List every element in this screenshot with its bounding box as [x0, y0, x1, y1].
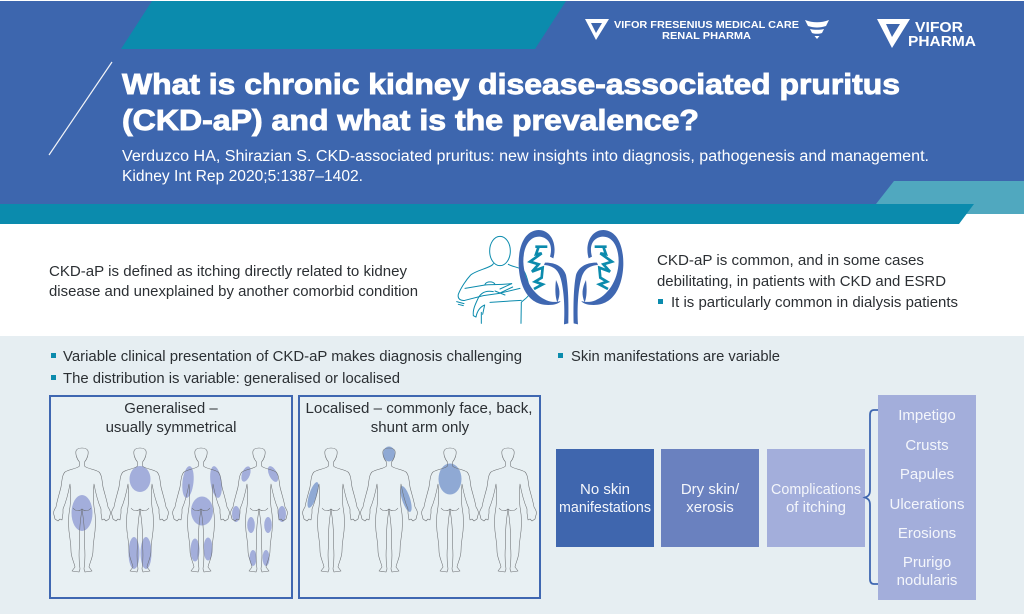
box: dry skin: [661, 449, 759, 547]
citation: Kidney Int Rep 2020;5:1387–1402.: [122, 168, 363, 185]
box: complications of itching: Complications: [771, 481, 861, 498]
bullets: diagnosis: Variable clinical presentation of CKD-aP makes diagnosis challenging: [63, 348, 522, 365]
logo: Vifor Pharma: [877, 19, 977, 50]
bottom teal bar: [0, 204, 974, 224]
title: What is chronic kidney disease-associated pruritus: [122, 69, 900, 101]
body figures: [303, 448, 536, 572]
logo: Vifor Fresenius Medical Care Renal Pharma: [585, 19, 829, 42]
box: no skin manifestations: No skin: [580, 481, 630, 498]
icon: person itching with kidneys: [457, 230, 623, 324]
panel: localised: [299, 396, 540, 598]
bullets: diagnosis: [51, 348, 522, 387]
logo: Vifor Fresenius Medical Care Renal Pharma: RENAL PHARMA: [662, 30, 751, 42]
panel: complications list: [878, 395, 976, 600]
panel: generalised: Generalised –: [124, 400, 218, 417]
box: no skin manifestations: manifestations: [559, 499, 651, 516]
title: (CKD-aP) and what is the prevalence?: [122, 105, 699, 137]
lower section background: [0, 336, 1024, 614]
left kidney: [519, 230, 561, 305]
diagonal accent line: [49, 62, 112, 155]
logo: Vifor Pharma: PHARMA: [908, 34, 977, 50]
title: [122, 69, 900, 137]
panel: complications list: Crusts: [905, 437, 949, 454]
prevalence text: CKD-aP is common, and in some cases: [657, 252, 924, 269]
citation: Verduzco HA, Shirazian S. CKD-associated pruritus: new insights into diagnosis, pathogenesis and management.: [122, 148, 929, 165]
right kidney: [574, 230, 623, 324]
itch areas: [305, 446, 462, 513]
panel: localised: shunt arm only: [371, 419, 470, 436]
bracket: [865, 410, 878, 584]
panel: complications list: nodularis: [897, 572, 957, 589]
header banner: [0, 1, 1024, 224]
panel: complications list: Papules: [900, 466, 954, 483]
definition text: [49, 263, 418, 300]
box: complications of itching: of itching: [786, 499, 846, 516]
box: no skin manifestations: [556, 449, 654, 547]
box: dry skin: xerosis: [686, 499, 734, 516]
panel: complications list: Ulcerations: [889, 496, 965, 513]
bullets: diagnosis: The distribution is variable: generalised or localised: [63, 370, 400, 387]
bullet: skin manifestations: Skin manifestations are variable: [571, 348, 780, 365]
person outline: [457, 236, 530, 323]
logo: Vifor Fresenius Medical Care Renal Pharma: VIFOR FRESENIUS MEDICAL CARE: [614, 19, 799, 31]
prevalence text: debilitating, in patients with CKD and ESRD: [657, 273, 946, 290]
box: complications of itching: [767, 449, 865, 547]
prevalence text: It is particularly common in dialysis patients: [671, 294, 958, 311]
citation: [122, 148, 929, 185]
panel: complications list: Prurigo: [903, 554, 951, 571]
top teal shape: [121, 1, 566, 49]
body figures: [54, 448, 287, 572]
definition text: CKD-aP is defined as itching directly related to kidney: [49, 263, 407, 280]
logo: Vifor Pharma: VIFOR: [915, 20, 964, 36]
panel: localised: Localised – commonly face, back,: [306, 400, 532, 417]
box: dry skin: Dry skin/: [681, 481, 740, 498]
panel: generalised: [50, 396, 292, 598]
definition text: disease and unexplained by another comorbid condition: [49, 283, 418, 300]
panel: complications list: Erosions: [898, 525, 956, 542]
light teal corner: [876, 181, 1024, 214]
itch areas: [72, 465, 286, 569]
panel: generalised: usually symmetrical: [106, 419, 236, 436]
panel: complications list: Impetigo: [898, 407, 956, 424]
prevalence text: [657, 252, 958, 311]
